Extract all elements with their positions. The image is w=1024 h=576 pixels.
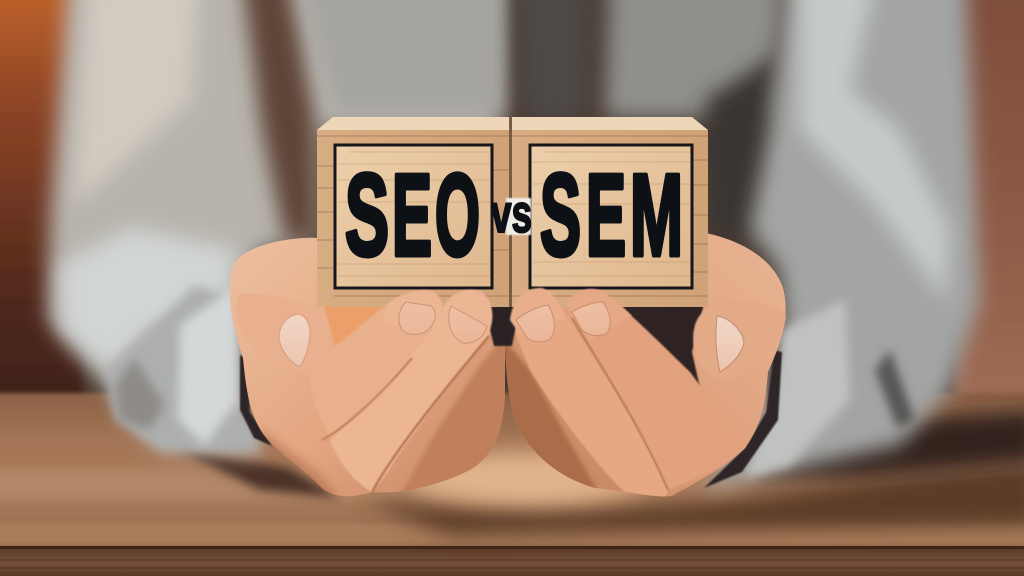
right block top face [512, 117, 708, 130]
left cuff fold [115, 358, 165, 430]
center shirt shadow [515, 0, 590, 118]
right pinky nail [572, 302, 610, 336]
right ring fingertip [510, 288, 566, 335]
right torso gray [605, 0, 785, 118]
SEM label: S [540, 150, 581, 280]
wooden table [0, 393, 1024, 576]
dark gap under right block [622, 307, 704, 386]
wooden block: SEO: O [435, 150, 480, 280]
right pinky finger [613, 307, 748, 490]
block seam [509, 117, 512, 307]
vs label: vs [491, 184, 532, 244]
left block top face [317, 117, 509, 130]
left hand shading [260, 307, 505, 495]
right hand shading [505, 307, 748, 496]
left torso gray [295, 0, 505, 115]
left block recess [335, 145, 492, 288]
left hand skin [230, 238, 505, 496]
left bottom shade [260, 429, 338, 495]
right sleeve pale panel [745, 300, 850, 478]
right highlight [800, 0, 950, 300]
left thumb [236, 294, 330, 372]
right inner finger shade [505, 346, 597, 488]
SEM label: M [630, 150, 683, 280]
left block front [317, 130, 509, 307]
right shirt panel [700, 0, 980, 490]
left ring finger shade [402, 346, 505, 491]
right sleeve fold [875, 350, 915, 428]
SEM label [540, 150, 683, 280]
right block front [512, 130, 708, 307]
table shadow under the hands [170, 410, 1024, 535]
left sleeve highlight [60, 228, 235, 370]
shirt: torso and sleeves [48, 0, 980, 490]
right cuff inner shadow [704, 350, 782, 488]
orange gap glow [324, 307, 384, 345]
left middle nail [449, 306, 487, 343]
right thumb [693, 300, 786, 379]
right hand [500, 232, 786, 498]
left shirt panel [48, 0, 500, 455]
left index fingertip [385, 290, 443, 325]
vs white patch [506, 198, 531, 235]
right hand skin [505, 232, 786, 496]
right dark side [705, 50, 785, 240]
SEM label: E [586, 150, 626, 280]
vs badge [491, 184, 532, 244]
left crease one [322, 358, 412, 440]
right ring finger [515, 317, 668, 496]
right ring nail [516, 305, 554, 342]
left middle finger [330, 313, 490, 492]
left middle fingertip [443, 290, 492, 330]
upper left highlight [75, 0, 200, 205]
left index nail [399, 302, 435, 334]
wooden block: SEM [512, 117, 708, 307]
SEO label [345, 150, 480, 280]
right pinky fingertip [566, 289, 632, 340]
SEO label: S [345, 150, 389, 280]
dark gap at centre [484, 305, 520, 346]
wooden block: SEO [317, 117, 509, 307]
background wall [0, 0, 1024, 430]
left hand [230, 238, 510, 505]
left sleeve pale panel [178, 285, 238, 445]
left crease two [372, 336, 489, 492]
fingertips overlapping the blocks [385, 288, 632, 343]
left torso shadow [240, 0, 318, 240]
right block recess [530, 145, 692, 288]
right crease [572, 318, 668, 490]
left index finger [319, 307, 434, 434]
SEO label: E [392, 150, 432, 280]
left cuff [105, 285, 262, 450]
left thumb nail [279, 314, 310, 367]
right thumb nail [716, 316, 744, 372]
left cuff inner shadow [240, 355, 272, 446]
